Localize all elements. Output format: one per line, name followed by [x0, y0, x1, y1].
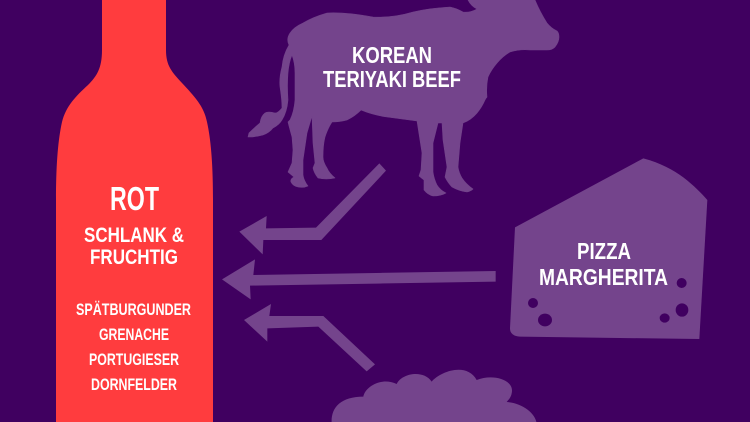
label: pizza margherita: [539, 238, 668, 290]
label: Korean teriyaki beef: [323, 42, 461, 92]
label: Korean teriyaki beef: KOREAN: [352, 42, 432, 68]
icon: cow silhouette: [248, 0, 559, 196]
subheading: style: FRUCHTIG: [90, 246, 178, 269]
panel: pizza margherita: [510, 158, 707, 339]
grape variety list: GRENACHE: [99, 326, 169, 344]
grape variety list: SPÄTBURGUNDER: [76, 301, 191, 319]
subheading: style: [84, 224, 184, 269]
heading: ROT: ROT: [110, 180, 159, 217]
subheading: style: SCHLANK &: [84, 224, 184, 247]
bottle silhouette: [56, 0, 213, 422]
arrow: from grapes to bottle: [244, 304, 375, 371]
icon: cheese wedge: [510, 158, 707, 339]
grape variety list: PORTUGIESER: [89, 351, 179, 369]
label: Korean teriyaki beef: TERIYAKI BEEF: [323, 66, 461, 92]
label: pizza margherita: PIZZA: [577, 238, 631, 264]
arrow: from cow to bottle: [239, 163, 386, 254]
arrow: from pizza to bottle: [222, 259, 496, 299]
label: pizza margherita: MARGHERITA: [539, 264, 668, 290]
icon: cloud-shaped dish at bottom: [332, 370, 537, 422]
grape variety list: [76, 301, 191, 394]
panel: red wine bottle: [56, 0, 213, 422]
panel: Korean teriyaki beef: [248, 0, 559, 196]
grape variety list: DORNFELDER: [91, 376, 177, 394]
